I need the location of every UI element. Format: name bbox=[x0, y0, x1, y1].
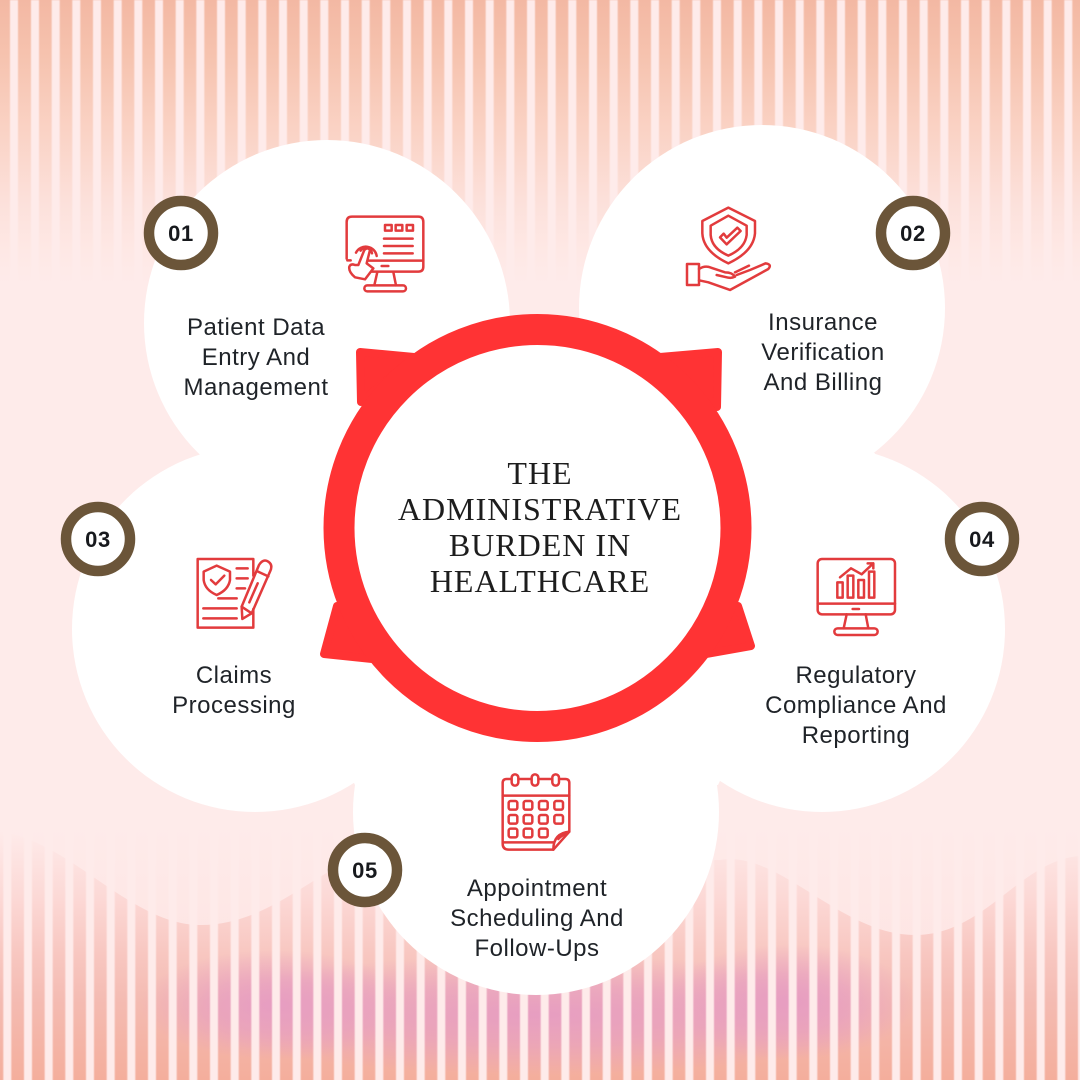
label: regulatory compliance and reporting: Compliance And bbox=[765, 692, 947, 719]
label: patient data entry and management: Management bbox=[183, 374, 329, 401]
title: BURDEN IN bbox=[449, 527, 631, 563]
panel 03: claims processing bbox=[66, 446, 438, 812]
badge 01 bbox=[149, 201, 213, 265]
title: THE bbox=[507, 455, 573, 491]
label: appointment scheduling and follow-ups: Appointment bbox=[467, 875, 607, 902]
icon: monitor with chart bbox=[818, 559, 895, 635]
white flower backdrop centre bbox=[200, 400, 875, 785]
icon: claim document and pencil bbox=[198, 559, 271, 628]
badge 05: 05 bbox=[352, 858, 378, 883]
badge 03: 03 bbox=[85, 527, 111, 552]
badge 04 bbox=[950, 507, 1014, 571]
icon: calendar bbox=[503, 774, 569, 850]
label: insurance verification and billing: Insurance bbox=[768, 309, 878, 336]
label: insurance verification and billing: And Billing bbox=[764, 369, 882, 396]
badge 02 bbox=[881, 201, 945, 265]
label: claims processing: Processing bbox=[172, 692, 296, 719]
panel 04: regulatory compliance bbox=[639, 446, 1014, 812]
panel 02: insurance verification bbox=[579, 125, 945, 491]
badge 05 bbox=[333, 838, 397, 902]
badge 04: 04 bbox=[969, 527, 995, 552]
title: ADMINISTRATIVE bbox=[398, 491, 682, 527]
label: patient data entry and management: Patient Data bbox=[187, 314, 325, 341]
badge 02: 02 bbox=[900, 221, 926, 246]
title: HEALTHCARE bbox=[430, 563, 650, 599]
label: insurance verification and billing: Verification bbox=[761, 339, 885, 366]
label: patient data entry and management: Entry And bbox=[202, 344, 310, 371]
label: regulatory compliance and reporting: Reporting bbox=[802, 722, 910, 749]
badge 03 bbox=[66, 507, 130, 571]
panel 01: patient data entry bbox=[144, 140, 510, 506]
icon: touch monitor bbox=[347, 217, 423, 291]
central red ring with spikes bbox=[324, 330, 751, 726]
label: regulatory compliance and reporting: Regulatory bbox=[795, 662, 917, 689]
panel 05: appointment scheduling bbox=[333, 629, 719, 995]
badge 01: 01 bbox=[168, 221, 194, 246]
label: appointment scheduling and follow-ups: Scheduling And bbox=[450, 905, 624, 932]
label: appointment scheduling and follow-ups: Follow-Ups bbox=[474, 935, 600, 962]
icon: shield in hand bbox=[687, 208, 770, 290]
label: claims processing: Claims bbox=[196, 662, 272, 689]
